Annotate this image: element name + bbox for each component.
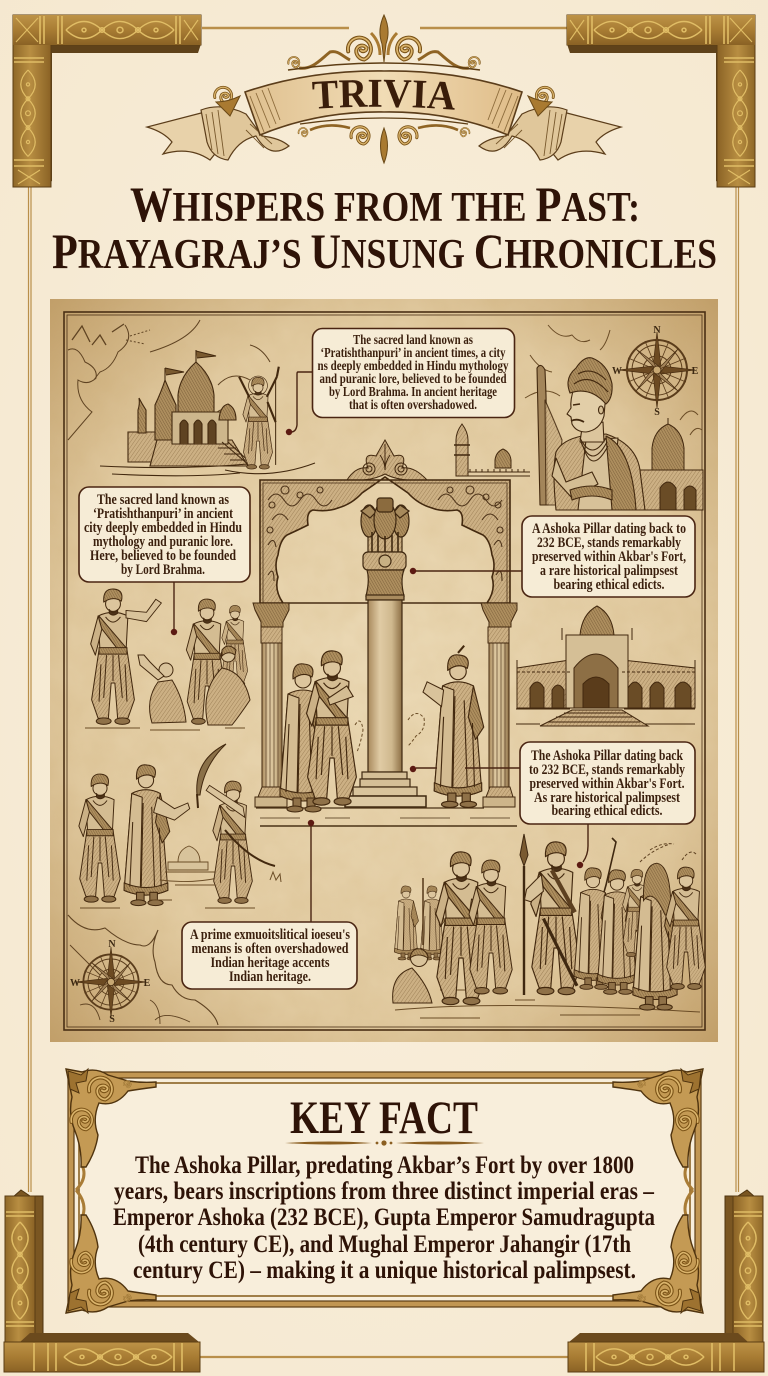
figures under arch: [280, 646, 484, 812]
title line 2: PRAYAGRAJ’S UNSUNG CHRONICLES: [52, 223, 717, 279]
callout 4: to 232 BCE, stands remarkably: [529, 762, 686, 778]
callout 3 connector: [410, 568, 522, 574]
figure: soldier: [524, 842, 580, 995]
compass: bottom left: [70, 939, 151, 1025]
callout 1: and puranic lore, believed to be founded: [320, 371, 507, 386]
callout 3: 232 BCE, stands remarkably: [537, 535, 682, 551]
title: [52, 176, 717, 279]
lower left figures: [79, 744, 281, 908]
compass: top right: N: [653, 325, 661, 336]
icon: spear: [520, 834, 528, 995]
figure: orator: [91, 589, 161, 724]
callout 5: menans is often overshadowed: [192, 941, 348, 957]
figure: sage: [124, 765, 190, 906]
callout 4: The Ashoka Pillar dating back: [531, 748, 684, 764]
top ornament: [288, 15, 480, 70]
floor lines: [256, 808, 517, 826]
arch gateway: [253, 440, 517, 807]
callout 2: by Lord Brahma.: [121, 562, 205, 578]
compass: bottom left: S: [109, 1014, 115, 1025]
compass: top right: E: [692, 366, 699, 377]
figure: companion: [79, 774, 120, 902]
key fact body: Emperor Ashoka (232 BCE), Gupta Emperor Samudragupta: [113, 1202, 655, 1231]
callout 1 connector: [286, 372, 312, 435]
map top left: [68, 320, 270, 440]
figure: swordsman: [206, 781, 252, 903]
callout 5: Indian heritage.: [229, 969, 311, 985]
arch frame: [260, 477, 510, 603]
figure: distant guard: [394, 886, 418, 960]
ribbon: [245, 71, 522, 135]
key fact body: years, bears inscriptions from three distinct imperial eras –: [114, 1176, 654, 1205]
king portrait: [537, 358, 645, 510]
banner text: TRIVIA: [312, 80, 455, 110]
panel: illustrated map: [50, 299, 718, 1042]
figure: standing sage: [186, 599, 227, 724]
compass: top right: [612, 325, 699, 418]
map sketches top right: [525, 325, 702, 435]
book corner: bottom left: [4, 1190, 200, 1372]
bottom ornament: [299, 118, 469, 163]
panel: key fact: [66, 1069, 703, 1313]
callout 2: [79, 487, 250, 582]
parchment: [50, 299, 718, 1042]
side sprigs: [215, 87, 553, 116]
callout 1: The sacred land known as: [353, 332, 473, 347]
figure: veiled woman: [633, 863, 679, 1010]
arch scrollwork: [263, 483, 507, 603]
callout 2: Here, believed to be founded: [90, 548, 236, 564]
figure: noble: [307, 651, 356, 805]
callout 4: preserved within Akbar's Fort.: [530, 776, 684, 792]
callout 5: [182, 922, 357, 989]
temple: [100, 350, 315, 476]
right tail: [479, 107, 621, 160]
palace top right: [640, 418, 703, 510]
compass: top right: W: [612, 366, 622, 377]
callout 1: [312, 328, 514, 418]
callout 4: [520, 742, 695, 824]
left column: [253, 603, 289, 807]
right column: [481, 603, 517, 807]
compass: top right: S: [654, 407, 660, 418]
deity figure: [239, 367, 279, 469]
figure: guard: [574, 868, 614, 989]
book corner: top right: [567, 15, 755, 187]
callout 3: A Ashoka Pillar dating back to: [532, 521, 686, 537]
procession group: [393, 834, 705, 1018]
figure: kneeling child: [393, 949, 432, 1003]
book corner: top left: [13, 15, 201, 187]
figure: crouching man: [206, 646, 250, 725]
callout 5: A prime exmuoitslitical ioeseu's: [190, 927, 350, 943]
figure: last attendant: [666, 867, 705, 989]
callout 1: ‘Pratishthanpuri’ in ancient times, a city: [320, 345, 506, 360]
callout 3: preserved within Akbar's Fort,: [532, 549, 686, 565]
callout 3: [522, 516, 695, 597]
figure: turbaned elder: [436, 852, 495, 1005]
figure: attendant behind: [623, 869, 651, 957]
figure: attendant: [280, 664, 341, 812]
callout 5: Indian heritage accents: [210, 955, 330, 971]
key fact body: [113, 1150, 655, 1284]
figure: seated listener: [138, 655, 186, 723]
figure: elder: [222, 605, 248, 685]
callout 5 connector: [308, 820, 314, 922]
book corner: bottom right: [568, 1190, 764, 1372]
figure: distant guard: [420, 886, 444, 960]
compass: bottom left: W: [70, 978, 80, 989]
arch finial: [347, 440, 427, 480]
callout 1: by Lord Brahma. In ancient heritage: [329, 384, 497, 399]
callout 2 connector: [171, 582, 177, 635]
map bottom left: [68, 915, 218, 1025]
distant taj: [160, 846, 218, 882]
callout 2: mythology and puranic lore.: [93, 534, 233, 550]
compass: bottom left: N: [108, 939, 116, 950]
title line 1: WHISPERS FROM THE PAST:: [130, 176, 640, 232]
corner ornaments: [66, 1069, 703, 1313]
mosque: [516, 606, 695, 726]
callout 4 connectors: [410, 766, 588, 868]
callout 4: bearing ethical edicts.: [552, 803, 662, 819]
minaret and fort wall: [454, 424, 530, 476]
icon: curved sword: [197, 744, 226, 795]
left tail: [147, 107, 289, 160]
left assembly figures: [85, 589, 250, 730]
figure: attendant: [469, 860, 512, 994]
icon: royal staff: [537, 365, 548, 505]
key fact body: The Ashoka Pillar, predating Akbar’s Fort by over 1800: [135, 1150, 634, 1179]
callout 1: that is often overshadowed.: [349, 397, 477, 412]
compass: bottom left: E: [144, 978, 151, 989]
pillar lions: [361, 498, 409, 552]
key fact frame: [68, 1072, 701, 1307]
divider: [285, 1140, 484, 1146]
trivia banner: [145, 14, 623, 164]
icon: second spear: [585, 838, 616, 960]
callout 2: city deeply embedded in Hindu: [84, 520, 242, 536]
callout 3: bearing ethical edicts.: [554, 577, 664, 593]
shrubs: [355, 713, 424, 752]
figure: emperor: [423, 646, 484, 807]
ashoka pillar: [345, 498, 426, 807]
key fact body: century CE) – making it a unique historical palimpsest.: [133, 1255, 636, 1284]
key fact body: (4th century CE), and Mughal Emperor Jahangir (17th: [138, 1229, 631, 1258]
callout 4: As rare historical palimpsest: [534, 790, 680, 806]
callout 2: The sacred land known as: [97, 492, 229, 508]
callout 1: ns deeply embedded in Hindu mythology: [318, 358, 509, 373]
callout 2: ‘Pratishthanpuri’ in ancient: [93, 506, 233, 522]
figure: courtier: [598, 870, 638, 994]
key fact heading: KEY FACT: [290, 1092, 478, 1144]
callout 3: a rare historical palimpsest: [540, 563, 678, 579]
